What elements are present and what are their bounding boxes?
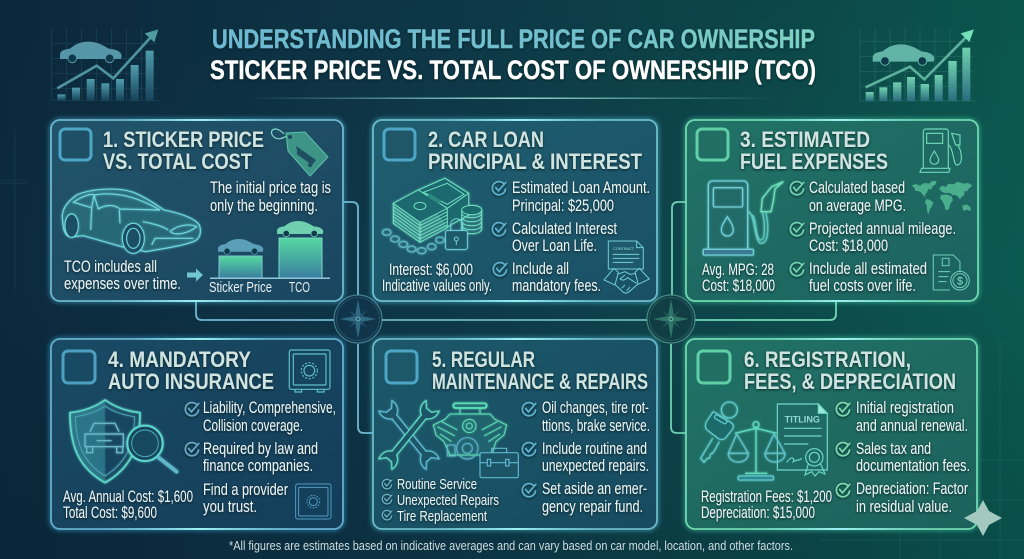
checklist: you trust. <box>203 498 257 516</box>
icon: car key <box>701 402 737 462</box>
panel: estimated fuel expenses <box>686 119 978 302</box>
checklist <box>185 399 336 516</box>
checklist: documentation fees. <box>856 457 970 475</box>
checklist: finance companies. <box>203 457 313 475</box>
icon: glowing car outline <box>62 189 200 253</box>
heading <box>108 347 274 394</box>
text: TCO includes <box>64 258 181 293</box>
heading: AUTO INSURANCE <box>108 369 274 394</box>
icon: sparkle <box>964 500 1002 536</box>
icon: small safe <box>296 484 331 519</box>
icon: receipt with dollar coin <box>933 255 969 290</box>
checkbox <box>63 351 95 383</box>
checklist: Collision coverage. <box>203 417 303 435</box>
checklist: fuel costs over life. <box>809 277 916 295</box>
compass right <box>647 295 695 343</box>
checklist: Estimated Loan Amount. <box>512 179 650 197</box>
heading <box>740 127 888 174</box>
icon: contract and handshake: CONTRACT <box>613 247 635 251</box>
heading: 6. REGISTRATION, <box>744 347 911 372</box>
icon: safe <box>289 350 330 392</box>
heading: FEES, & DEPRECIATION <box>744 369 956 394</box>
checklist: unexpected repairs. <box>542 457 649 475</box>
heading: 1. STICKER PRICE <box>103 127 264 152</box>
checklist: Find a provider <box>203 481 288 499</box>
text: annual cost: Total Cost: $9,600 <box>63 504 157 522</box>
icon: title document with seal <box>777 404 827 476</box>
icon: shield with car and magnifier <box>70 400 177 483</box>
checklist: Principal: $25,000 <box>512 197 614 215</box>
checklist: Include routine and <box>542 440 647 458</box>
title <box>210 24 816 85</box>
bar chart: sticker vs TCO: Sticker Price <box>209 279 272 296</box>
text: registration fees <box>701 488 832 522</box>
heading <box>744 347 956 394</box>
heading: MAINTENANCE & REPAIRS <box>432 369 648 394</box>
text: initial price tag: The initial price tag is <box>210 179 331 197</box>
title: UNDERSTANDING THE FULL PRICE OF CAR OWNERSHIP <box>212 24 815 54</box>
text: registration fees: Depreciation: $15,000 <box>701 504 815 522</box>
checklist: Include all <box>512 260 569 278</box>
heading: 2. CAR LOAN <box>428 127 544 152</box>
text: initial price tag: only the beginning. <box>210 197 318 215</box>
checklist <box>836 399 970 516</box>
icon: balance scale <box>728 422 785 480</box>
icon: car and rising chart left <box>52 28 160 101</box>
heading <box>428 127 642 174</box>
title: STICKER PRICE VS. TOTAL COST OF OWNERSHIP (TCO) <box>210 55 816 85</box>
checkbox <box>698 351 730 383</box>
checklist: in residual value. <box>856 498 952 516</box>
text: initial price tag <box>210 179 331 215</box>
checklist: Projected annual mileage. <box>809 220 956 238</box>
bar chart: sticker vs TCO <box>209 221 330 296</box>
checklist: mandatory fees. <box>512 277 601 295</box>
text: interest: Indicative values only. <box>382 277 492 295</box>
icon: crossed wrenches <box>379 400 439 470</box>
footnote: *All figures are estimates based on indicative averages and can vary based on car model, location, and other factors. <box>229 538 793 553</box>
checklist: Set aside an emer- <box>542 480 647 498</box>
text: avg MPG: Avg. MPG: 28 <box>702 261 774 279</box>
text: avg MPG <box>702 261 775 295</box>
text: annual cost: Avg. Annual Cost: $1,600 <box>63 488 193 506</box>
checklist: on average MPG. <box>809 197 906 215</box>
heading <box>103 127 264 174</box>
panel: regular maintenance and repairs <box>373 338 657 530</box>
heading: FUEL EXPENSES <box>740 149 888 174</box>
checklist: Calculated Interest <box>512 220 617 238</box>
text: TCO includes: TCO includes all <box>64 258 157 276</box>
checklist: Depreciation: Factor <box>856 480 968 498</box>
heading <box>432 347 648 394</box>
checklist: Cost: $18,000 <box>809 237 888 255</box>
heading: PRINCIPAL & INTEREST <box>428 149 642 174</box>
text: TCO includes: expenses over time. <box>64 275 181 293</box>
panel: registration, fees and depreciation <box>686 338 977 530</box>
checklist: ttions, brake service. <box>542 417 650 435</box>
arrow <box>187 268 203 282</box>
checklist <box>522 399 650 516</box>
connector lines <box>196 202 836 433</box>
heading: 5. REGULAR <box>432 347 535 372</box>
checklist: Required by law and <box>203 440 318 458</box>
text: annual cost <box>63 488 193 522</box>
heading: 4. MANDATORY <box>108 347 251 372</box>
small checklist: Tire Replacement <box>397 508 488 525</box>
text: interest <box>382 261 492 295</box>
checklist: Liability, Comprehensive, <box>203 399 336 417</box>
checklist: Oil changes, tire rot- <box>542 399 649 417</box>
heading: 3. ESTIMATED <box>740 127 870 152</box>
checkbox <box>386 351 417 383</box>
text: avg MPG: Cost: $18,000 <box>702 277 775 295</box>
icon: car and rising chart right <box>860 28 976 101</box>
checklist <box>790 179 956 295</box>
small checklist <box>382 476 499 525</box>
panel: mandatory auto insurance <box>51 338 343 530</box>
icon: title document with seal: TITLING <box>785 414 820 424</box>
heading: VS. TOTAL COST <box>103 149 252 174</box>
icon: large fuel pump with nozzle <box>703 181 783 255</box>
icon: receipt with dollar coin: $ <box>957 276 963 288</box>
checklist: Initial registration <box>856 399 954 417</box>
checklist: gency repair fund. <box>542 498 643 516</box>
icon: world map <box>912 181 972 214</box>
checkbox <box>697 129 728 160</box>
checklist: and annual renewal. <box>856 417 968 435</box>
text: registration fees: Registration Fees: $1,200 <box>701 488 832 506</box>
checklist: Calculated based <box>809 179 905 197</box>
small checklist: Unexpected Repairs <box>397 492 499 509</box>
icon: price tag <box>271 129 328 176</box>
small checklist: Routine Service <box>397 476 477 493</box>
icon: small fuel pump <box>920 129 961 172</box>
checkbox <box>384 129 415 160</box>
checklist: Sales tax and <box>856 440 931 458</box>
icon: engine <box>433 403 507 459</box>
text: interest: Interest: $6,000 <box>389 261 473 279</box>
panel: sticker price vs total cost <box>51 119 343 302</box>
compass left <box>334 295 382 343</box>
checklist <box>492 179 650 295</box>
checklist: Over Loan Life. <box>512 237 597 255</box>
icon: money stacks, chain and lock <box>382 178 482 254</box>
icon: contract and handshake <box>604 241 649 293</box>
checkbox <box>60 129 91 160</box>
bar chart: sticker vs TCO: TCO <box>289 279 310 296</box>
checklist: Include all estimated <box>809 260 927 278</box>
panel: car loan principal and interest <box>373 119 657 302</box>
icon: toolbox <box>480 448 518 478</box>
